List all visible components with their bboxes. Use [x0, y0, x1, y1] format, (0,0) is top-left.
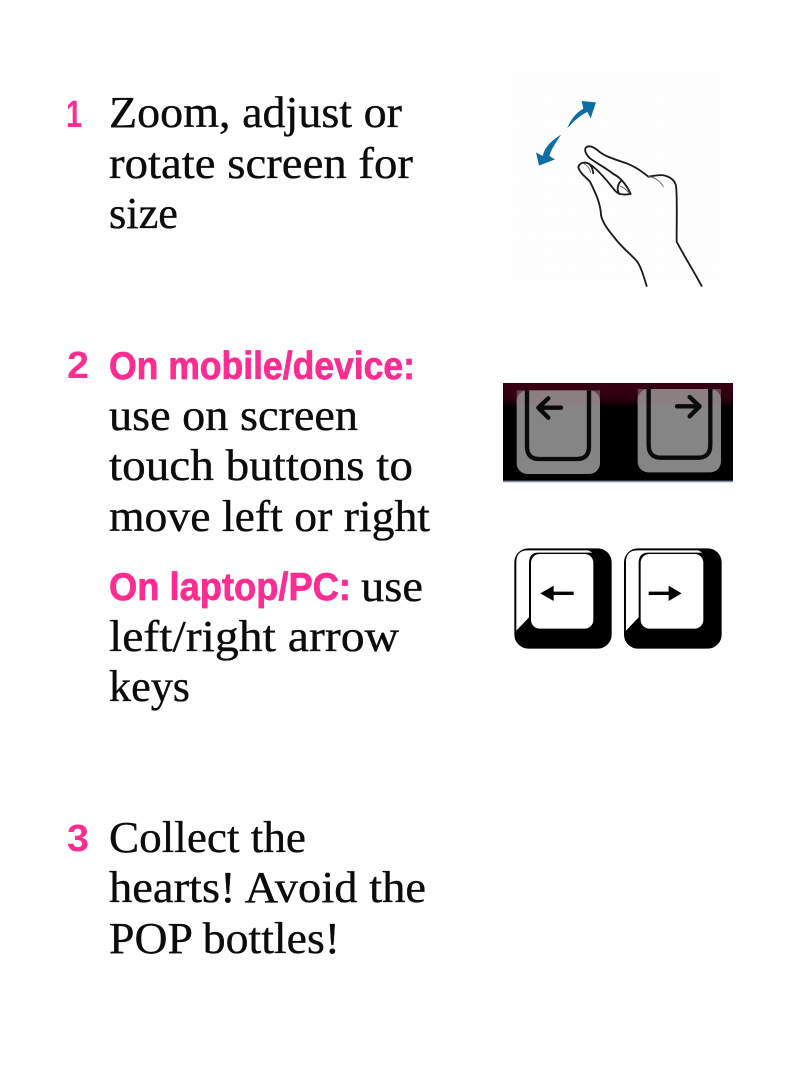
- step 1 text: [109, 88, 413, 238]
- icon: pinch to zoom hand: [510, 68, 727, 287]
- step 2 laptop text: [109, 562, 423, 711]
- left arrow key: [514, 548, 612, 649]
- step 2 mobile heading: On mobile/device:: [109, 345, 415, 388]
- left touch button: [517, 390, 600, 474]
- icon: keyboard arrow keys: [514, 548, 722, 649]
- step 1 number: 1: [66, 94, 82, 136]
- step 2 mobile text: [109, 391, 430, 541]
- step 3: [67, 813, 426, 963]
- step 3 text: [109, 813, 426, 963]
- step 1 text: rotate screen for: [109, 139, 413, 188]
- step 1 text: Zoom, adjust or: [109, 88, 402, 137]
- icon: hand outline: [578, 146, 702, 286]
- step 2 laptop text: left/right arrow: [109, 612, 399, 661]
- step 2 mobile text: move left or right: [109, 492, 430, 541]
- step 2 laptop text: use: [361, 562, 423, 611]
- step 2 laptop text: keys: [109, 662, 190, 711]
- icon: zoom arrows: [536, 101, 596, 166]
- step 2 mobile text: touch buttons to: [109, 441, 413, 490]
- right touch button: [638, 389, 721, 472]
- step 1: [66, 88, 413, 238]
- icon: on-screen touch buttons: [503, 383, 733, 482]
- step 2 number: 2: [67, 345, 89, 387]
- right arrow key: [624, 548, 722, 649]
- step 2 mobile text: use on screen: [109, 391, 358, 440]
- step 1 text: size: [109, 189, 178, 238]
- step 3 text: POP bottles!: [109, 914, 340, 963]
- step 3 text: Collect the: [109, 813, 306, 862]
- step 2: [67, 345, 430, 711]
- step 3 number: 3: [67, 818, 89, 860]
- step 2 laptop heading: On laptop/PC:: [109, 566, 351, 609]
- step 3 text: hearts! Avoid the: [109, 863, 426, 912]
